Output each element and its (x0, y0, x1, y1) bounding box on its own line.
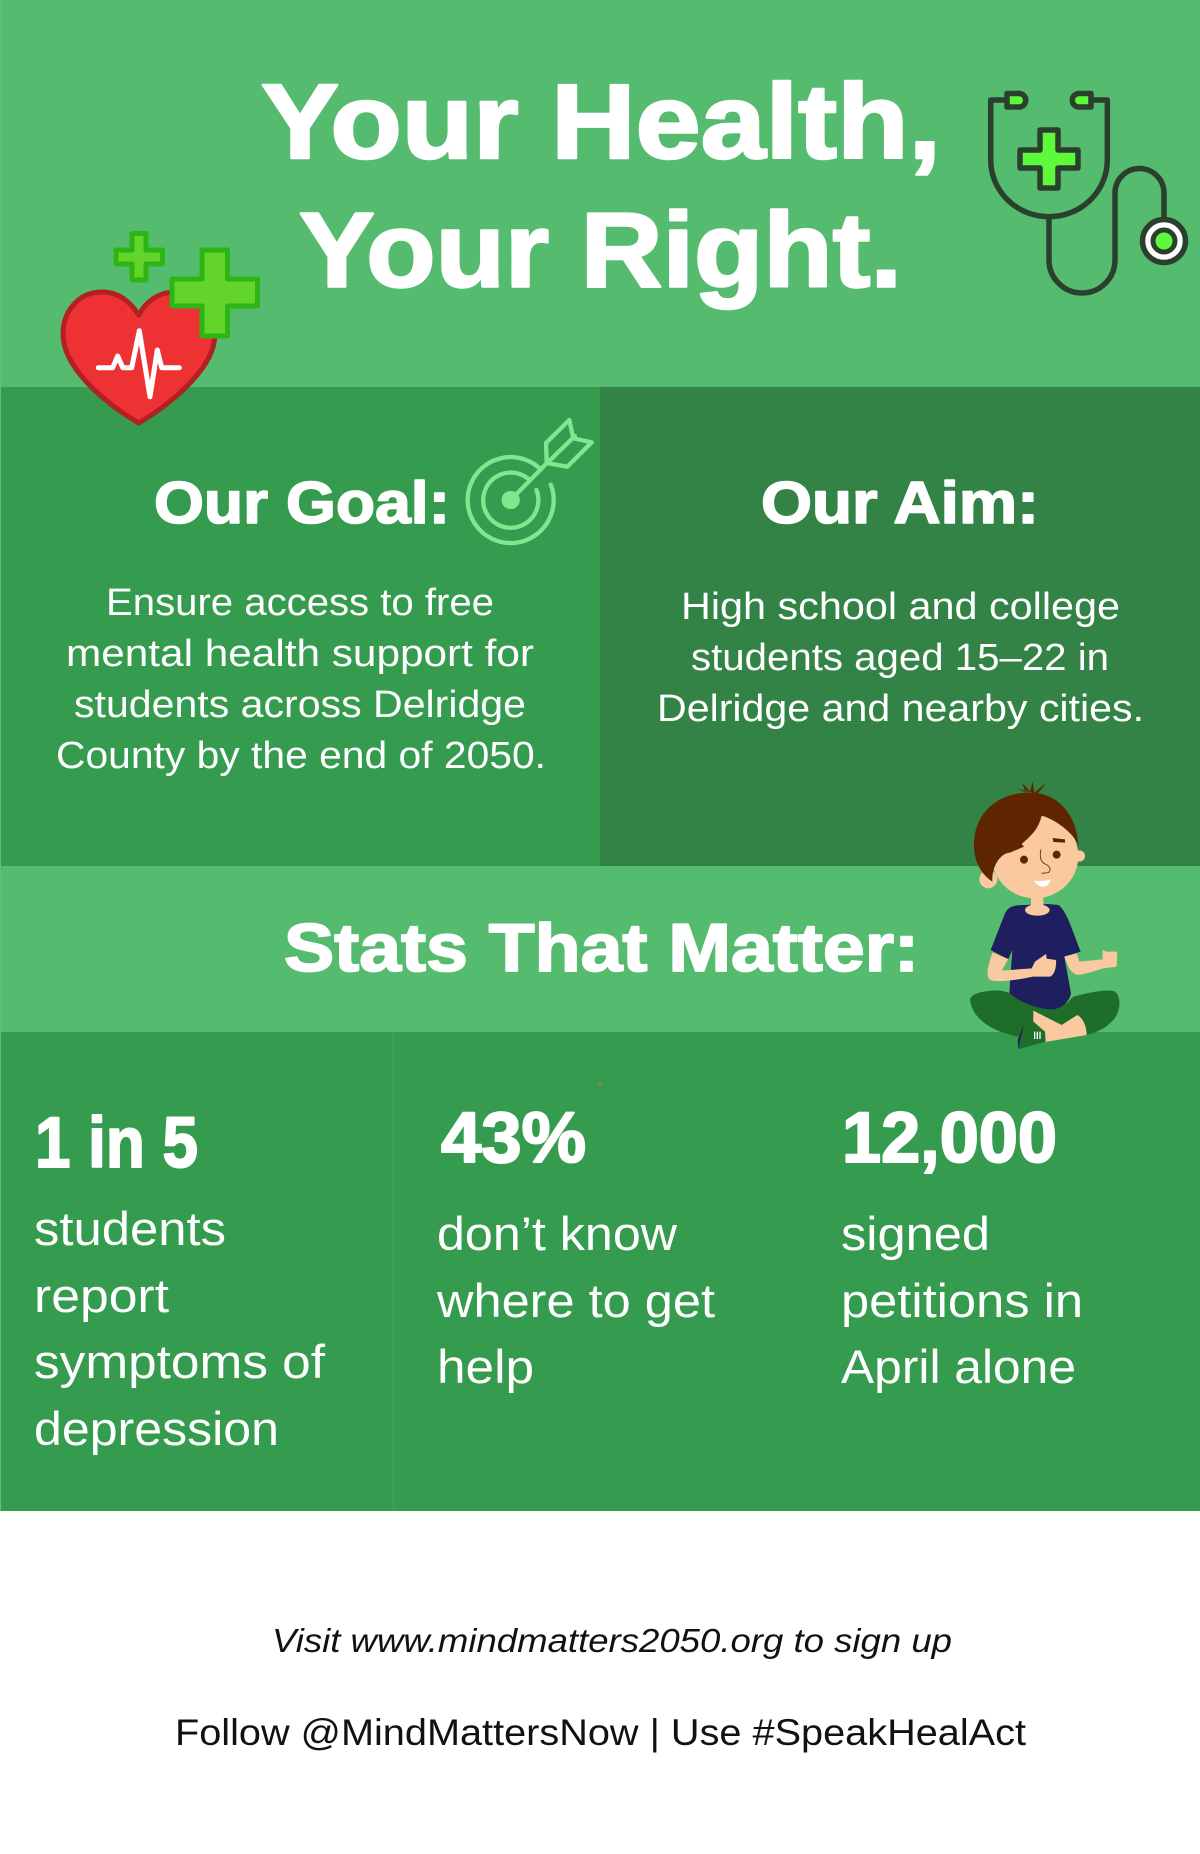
panel: stats (0, 1032, 1200, 1511)
stat: 1 in 5: 1 in 5 (35, 1104, 198, 1183)
boy: collar and neck (1025, 893, 1050, 916)
title: Your Health, (261, 63, 941, 181)
text: our goal body: students across Delridge (74, 684, 526, 726)
text: our goal body: Ensure access to free (106, 582, 494, 624)
stat: 43%: don’t know (437, 1207, 678, 1260)
stat: 1 in 5: depression (34, 1402, 279, 1455)
icon: stethoscope (991, 94, 1186, 293)
heading: stats that matter: Stats That Matter: (284, 910, 919, 986)
boy: shirt (991, 904, 1081, 1009)
boy: ears (979, 850, 1085, 888)
boy: foot (1033, 1011, 1087, 1042)
illustration: boy sitting cross-legged (970, 782, 1119, 1049)
text: our goal body (56, 582, 546, 777)
stat: 43%: where to get (436, 1274, 715, 1327)
heading: our goal: Our Goal: (154, 470, 450, 536)
text: our goal body: County by the end of 2050. (56, 735, 546, 777)
text: our aim body: Delridge and nearby cities. (657, 688, 1144, 730)
stat: 12,000: April alone (841, 1340, 1076, 1393)
stat: 43% (436, 1099, 715, 1393)
text: our aim body: students aged 15–22 in (691, 637, 1109, 679)
boy: arms (987, 950, 1117, 981)
boy: hair (974, 782, 1078, 882)
stat: 1 in 5: students (34, 1202, 226, 1255)
stat: 43%: help (437, 1340, 534, 1393)
boy: legs (970, 991, 1119, 1040)
text: our goal body: mental health support for (66, 633, 534, 675)
panel: stats heading band (0, 866, 1200, 1032)
boy: head (992, 814, 1078, 898)
panel: our goal (0, 387, 600, 866)
boy: face (1020, 838, 1065, 887)
stat: 12,000: 12,000 (842, 1099, 1057, 1178)
stat: 12,000 (841, 1099, 1083, 1393)
icon: target with arrow (468, 420, 592, 543)
stat: 1 in 5: report (34, 1269, 169, 1322)
stat: 12,000: petitions in (841, 1274, 1083, 1327)
text: our aim body: High school and college (681, 586, 1120, 628)
footer: website line: Visit www.mindmatters2050.org to sign up (272, 1622, 952, 1659)
title: Your Right. (299, 192, 902, 310)
panel: header (0, 0, 1200, 387)
small dot mark (598, 1082, 602, 1086)
stat: 1 in 5 (34, 1104, 326, 1455)
text: our aim body (657, 586, 1144, 730)
heading: our aim: Our Aim: (761, 470, 1039, 536)
footer: social line: Follow @MindMattersNow | Use #SpeakHealAct (175, 1712, 1027, 1753)
stat: 12,000: signed (841, 1207, 990, 1260)
title (261, 63, 941, 310)
stat: 1 in 5: symptoms of (34, 1335, 326, 1388)
icon: heart with crosses (63, 234, 258, 423)
panel: our aim (600, 387, 1200, 866)
stat: 43%: 43% (441, 1099, 586, 1178)
boy: shoe (1018, 1022, 1046, 1049)
